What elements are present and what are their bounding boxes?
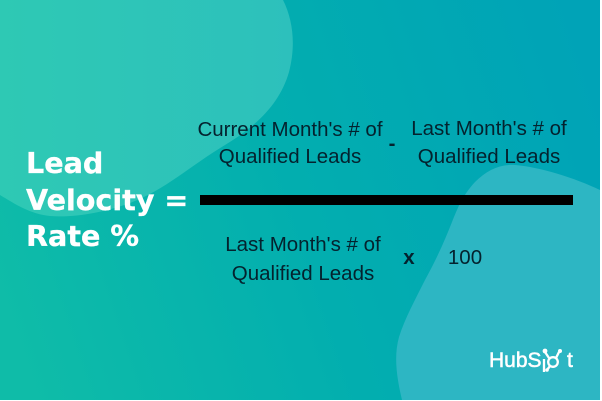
heading: Lead Velocity Rate %: Lead <box>26 146 103 180</box>
denominator: last month <box>225 233 381 285</box>
minus sign: - <box>389 132 395 155</box>
heading: Lead Velocity Rate %: Velocity = <box>26 182 188 216</box>
HubSpot logo <box>489 348 573 372</box>
heading: Lead Velocity Rate %: Rate % <box>26 219 139 253</box>
numerator: last month <box>411 117 567 168</box>
number 100: 100 <box>448 246 482 269</box>
logo sprocket <box>542 348 562 372</box>
logo wordmark: HubS <box>489 349 542 372</box>
heading: Lead Velocity Rate % <box>26 146 188 253</box>
fraction bar <box>200 195 573 205</box>
numerator: last month: Qualified Leads <box>418 145 560 168</box>
numerator: current month: Qualified Leads <box>219 145 361 168</box>
numerator: current month: Current Month's # of <box>197 118 383 141</box>
multiply sign: x <box>403 246 415 269</box>
denominator: last month: Qualified Leads <box>232 262 374 285</box>
denominator: last month: Last Month's # of <box>225 233 381 256</box>
HubSpot logo: t <box>567 349 573 372</box>
numerator: current month <box>197 118 383 168</box>
numerator: last month: Last Month's # of <box>411 117 567 140</box>
logo wordmark <box>489 349 573 372</box>
